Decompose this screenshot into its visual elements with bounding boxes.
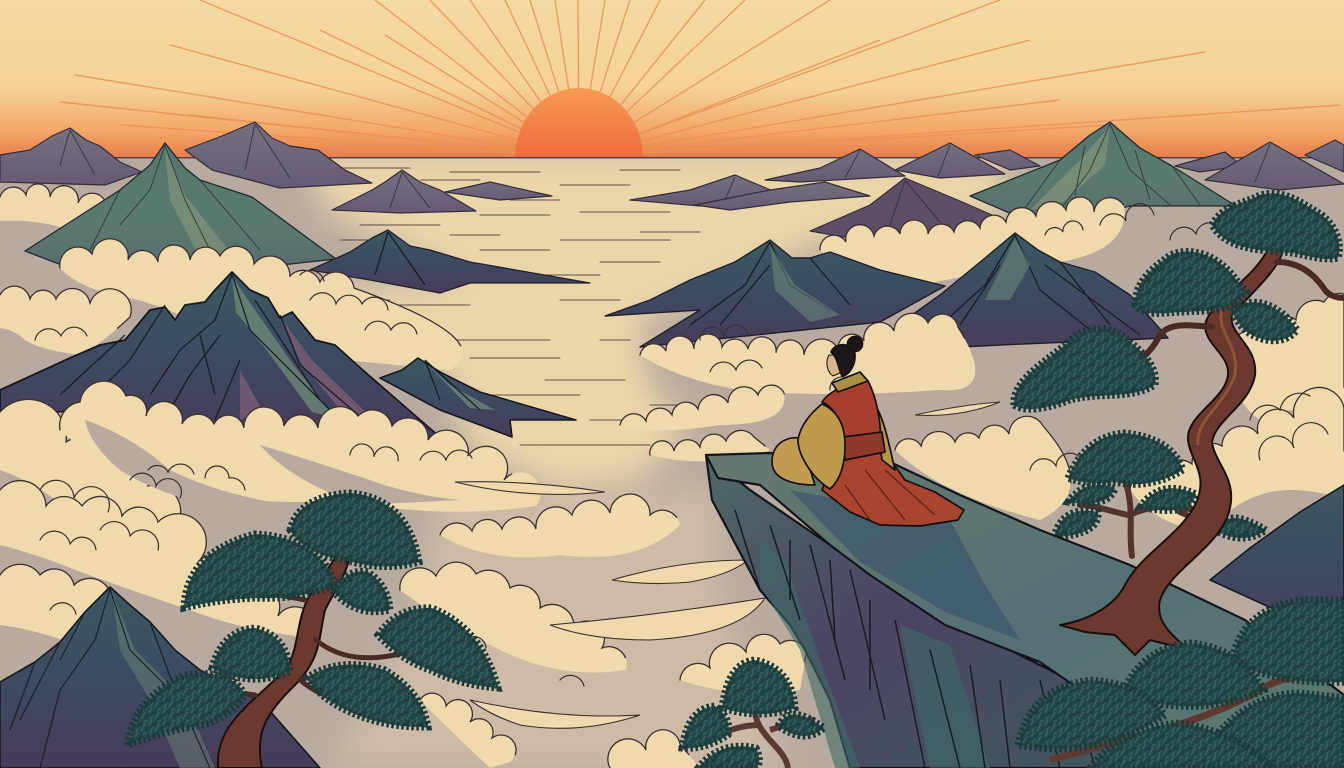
face <box>827 355 842 376</box>
cloud band: below figure left <box>650 430 770 461</box>
cloud shadows, left <box>85 420 460 510</box>
cloud bank: upper right left part <box>820 197 1124 290</box>
sash <box>843 432 885 460</box>
right pine tree <box>1014 193 1344 655</box>
large left mountain <box>0 272 576 438</box>
mid mountains, right <box>605 233 1168 352</box>
sky <box>0 0 1344 160</box>
horizon line <box>0 157 1344 158</box>
left pine tree <box>128 493 498 768</box>
foliage <box>290 493 419 567</box>
cloud bank: upper left main <box>60 239 463 370</box>
cloud bank: far left <box>0 286 131 355</box>
cloud band: right of figure <box>895 416 1071 520</box>
cloud contour arcs <box>35 204 1328 686</box>
trunk <box>1060 245 1283 655</box>
ochre sleeve <box>798 404 845 489</box>
facets on right mid mountains <box>770 238 1030 322</box>
far mountains <box>0 122 1344 238</box>
collar <box>832 372 868 392</box>
mountain: bottom right <box>1210 485 1344 640</box>
sun rays <box>60 0 1340 157</box>
mid mountain, left far <box>310 230 590 293</box>
cloud band: under large mountain <box>60 381 541 512</box>
hair bun <box>848 336 862 352</box>
cloud band: lower centre <box>400 562 627 672</box>
red skirt <box>822 445 964 526</box>
small centre pine <box>682 660 824 768</box>
branches <box>1040 262 1344 395</box>
trunk highlight <box>1198 310 1236 445</box>
cloud band: by figure <box>620 385 784 430</box>
mountain ridge lines <box>60 232 1140 425</box>
mountain: bottom left <box>0 587 320 768</box>
cloud band: far right middle <box>1130 388 1344 530</box>
cloud band: bottom centre <box>420 693 516 768</box>
far ridge lines <box>60 124 1270 260</box>
cloud bank: upper left <box>0 184 107 230</box>
cliff <box>706 453 1344 768</box>
cloud band: far right upper <box>1230 293 1344 420</box>
cloud band: right centre <box>640 313 975 394</box>
foliage: crown <box>1212 193 1339 259</box>
sun <box>515 88 643 158</box>
seated figure in robes <box>772 336 964 526</box>
shadow of figure on cliff top <box>790 490 1020 640</box>
red robe back <box>822 381 880 452</box>
foliage: third <box>1232 302 1297 341</box>
trunk <box>218 545 350 768</box>
cloud band: bottom <box>608 730 700 768</box>
cliff cracks and facets <box>735 510 1095 768</box>
cloud band: lower right of centre <box>680 634 806 693</box>
cliff top <box>706 453 1344 768</box>
cloud band: centre <box>440 494 680 558</box>
foreground pine foliage, bottom right <box>1018 600 1344 768</box>
green mountains, far row <box>25 122 1236 276</box>
skirt folds <box>845 470 935 520</box>
lap <box>772 438 815 485</box>
cloud band: lower left <box>0 481 315 638</box>
cloud band: under large mountain outer <box>0 399 181 527</box>
water-like cloud lines <box>330 168 700 445</box>
small pine behind cliff <box>1054 433 1266 556</box>
hair <box>831 345 855 376</box>
branches <box>180 590 430 712</box>
cliff face <box>706 455 1180 768</box>
foliage: second <box>1135 252 1247 313</box>
cloud band: lower left edge <box>0 564 128 650</box>
foliage: low left <box>1014 328 1156 409</box>
right sleeve <box>875 405 895 470</box>
cloud streaks <box>455 402 1000 728</box>
sea of clouds base with soft light <box>116 158 1315 768</box>
